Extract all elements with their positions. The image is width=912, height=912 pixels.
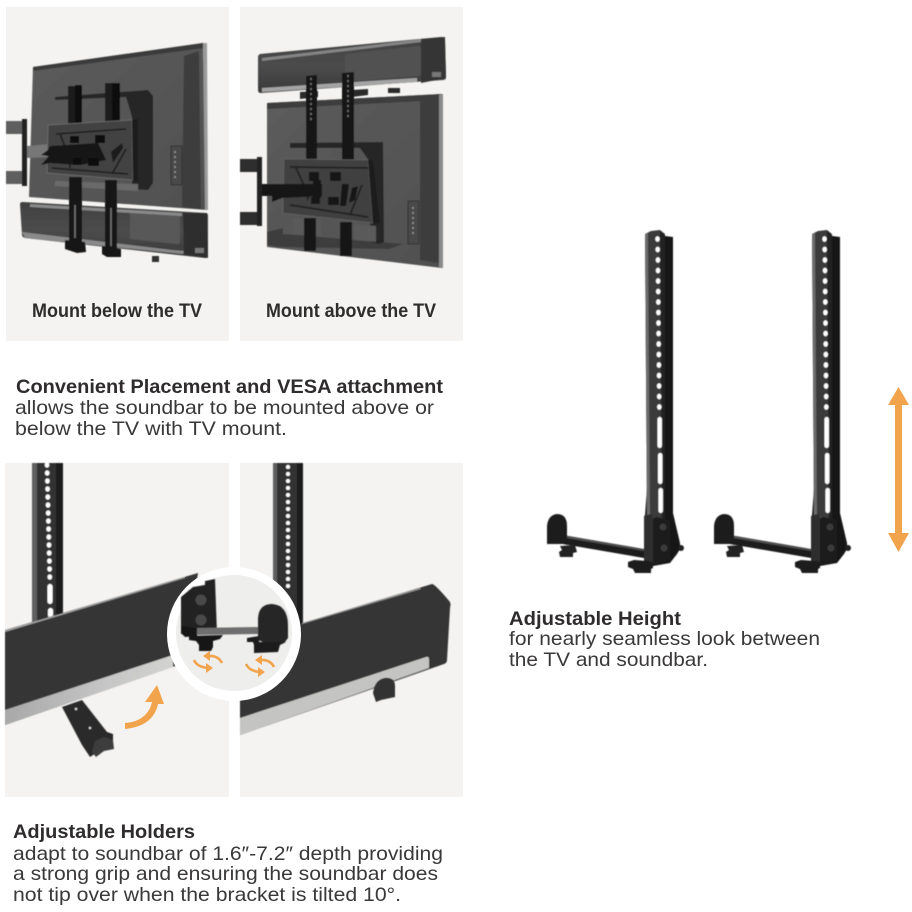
icon: double-headed height arrow (888, 387, 909, 552)
backplate (55, 90, 153, 190)
panel: holder folded out (5, 462, 229, 797)
lower uprights (69, 177, 117, 252)
photo: TV rear with soundbar mounted below (6, 43, 208, 262)
photo: left height-adjustable bracket (547, 230, 684, 573)
bracket rail (32, 462, 63, 628)
label: mount above the TV: Mount above the TV (266, 301, 436, 322)
text block: adjustable height: for nearly seamless look between (509, 628, 820, 650)
text block: convenient placement: below the TV with TV mount. (15, 418, 287, 440)
text block: adjustable holders: Adjustable Holders (13, 822, 195, 843)
text block: adjustable height: the TV and soundbar. (509, 649, 708, 671)
icon: curved orange arrow (125, 685, 164, 729)
soundbar (5, 573, 198, 725)
photo: TV rear with soundbar mounted above (240, 37, 446, 268)
holder arm (62, 700, 114, 757)
backplate (290, 142, 384, 244)
text block: adjustable height (509, 609, 820, 671)
text block: adjustable holders: not tip over when the bracket is tilted 10°. (13, 884, 401, 906)
panel: mount above the TV (240, 7, 463, 341)
callout: zoomed holder detail (167, 567, 301, 701)
photo: right height-adjustable bracket (714, 230, 851, 573)
text block: convenient placement: allows the soundbar to be mounted above or (15, 397, 435, 419)
panel: mount below the TV (6, 7, 229, 341)
holder cap detail (258, 604, 288, 642)
holder end cap (373, 678, 395, 702)
icons: orange rotate arrows (194, 656, 274, 672)
soundbar (240, 584, 450, 735)
text block: adjustable holders: adapt to soundbar of 1.6″-7.2″ depth providing (13, 843, 443, 865)
text block: adjustable holders: a strong grip and ensuring the soundbar does (13, 863, 438, 885)
text block: adjustable height: Adjustable Height (509, 609, 682, 630)
label: mount below the TV: Mount below the TV (32, 301, 202, 322)
bracket rail (273, 463, 303, 628)
panel: holder in place (240, 463, 463, 797)
text block: adjustable holders (13, 822, 443, 906)
bracket foot detail (181, 579, 217, 634)
text block: convenient placement: Convenient Placement and VESA attachment (16, 377, 444, 398)
text block: convenient placement (15, 377, 444, 440)
